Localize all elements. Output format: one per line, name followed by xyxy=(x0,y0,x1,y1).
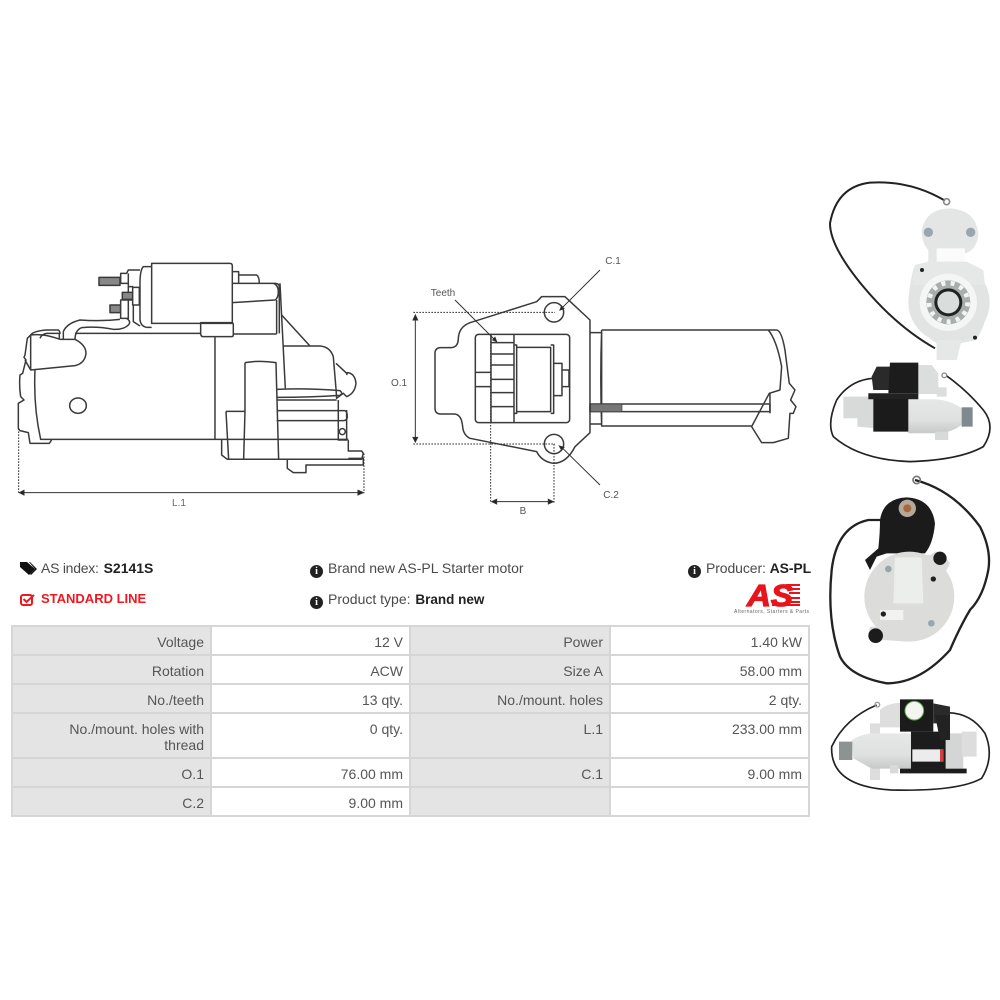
specification table: 76.00 mm xyxy=(341,766,403,782)
specification table: ACW xyxy=(370,663,403,679)
specification table: C.2 xyxy=(182,795,204,811)
specification table: 9.00 mm xyxy=(349,795,403,811)
dimension and callout lines xyxy=(413,270,600,504)
photo: starter side view 2 with cable xyxy=(832,699,989,790)
AS logo xyxy=(734,578,810,615)
specification table: Power xyxy=(563,634,603,650)
specification table: 12 V xyxy=(374,634,403,650)
producer: i xyxy=(693,566,696,577)
front view labels: O.1 xyxy=(391,378,407,389)
icon: tags xyxy=(20,562,37,575)
standard line label: STANDARD LINE xyxy=(41,591,146,606)
photo: starter side view 1 with cable xyxy=(831,363,990,462)
AS logo: Alternators, Starters & Parts xyxy=(734,609,810,615)
specification table: 9.00 mm xyxy=(748,766,802,782)
front view labels: C.2 xyxy=(603,490,619,501)
front view drawing of starter motor xyxy=(435,297,796,463)
specification table: 0 qty. xyxy=(370,721,403,737)
specification table: C.1 xyxy=(581,766,603,782)
brand note: Brand new AS-PL Starter motor xyxy=(328,560,524,576)
specification table: 1.40 kW xyxy=(751,634,802,650)
photo: starter rear with cable xyxy=(830,476,989,683)
specification table: 13 qty. xyxy=(362,692,403,708)
product type: i xyxy=(315,597,318,608)
icon: checked box xyxy=(21,595,34,605)
specification table: No./mount. holes xyxy=(497,692,603,708)
specification table: 2 qty. xyxy=(769,692,802,708)
AS index: AS index: S2141S xyxy=(41,560,153,576)
specification table: No./teeth xyxy=(147,692,204,708)
specification table: L.1 xyxy=(584,721,603,737)
front view labels: B xyxy=(520,506,527,517)
specification table: No./mount. holes with xyxy=(69,721,204,737)
product type: Product type: Brand new xyxy=(328,591,484,607)
L.1 dimension line xyxy=(19,428,364,495)
front view labels: C.1 xyxy=(605,256,621,267)
L.1 label: L.1 xyxy=(172,498,186,509)
specification table: 233.00 mm xyxy=(732,721,802,737)
front view labels xyxy=(391,256,621,517)
side view drawing of starter motor xyxy=(18,263,363,473)
specification table: Voltage xyxy=(157,634,204,650)
specification table: Rotation xyxy=(152,663,204,679)
specification table: 58.00 mm xyxy=(740,663,802,679)
specification table: thread xyxy=(164,737,204,753)
AS logo: AS xyxy=(746,578,793,613)
specification table: O.1 xyxy=(181,766,204,782)
specification table xyxy=(11,625,810,817)
producer: Producer: AS-PL xyxy=(706,560,811,576)
photo: starter front with cable xyxy=(830,182,990,360)
brand note: i xyxy=(315,566,318,577)
specification table: Size A xyxy=(563,663,603,679)
front view labels: Teeth xyxy=(431,288,455,299)
